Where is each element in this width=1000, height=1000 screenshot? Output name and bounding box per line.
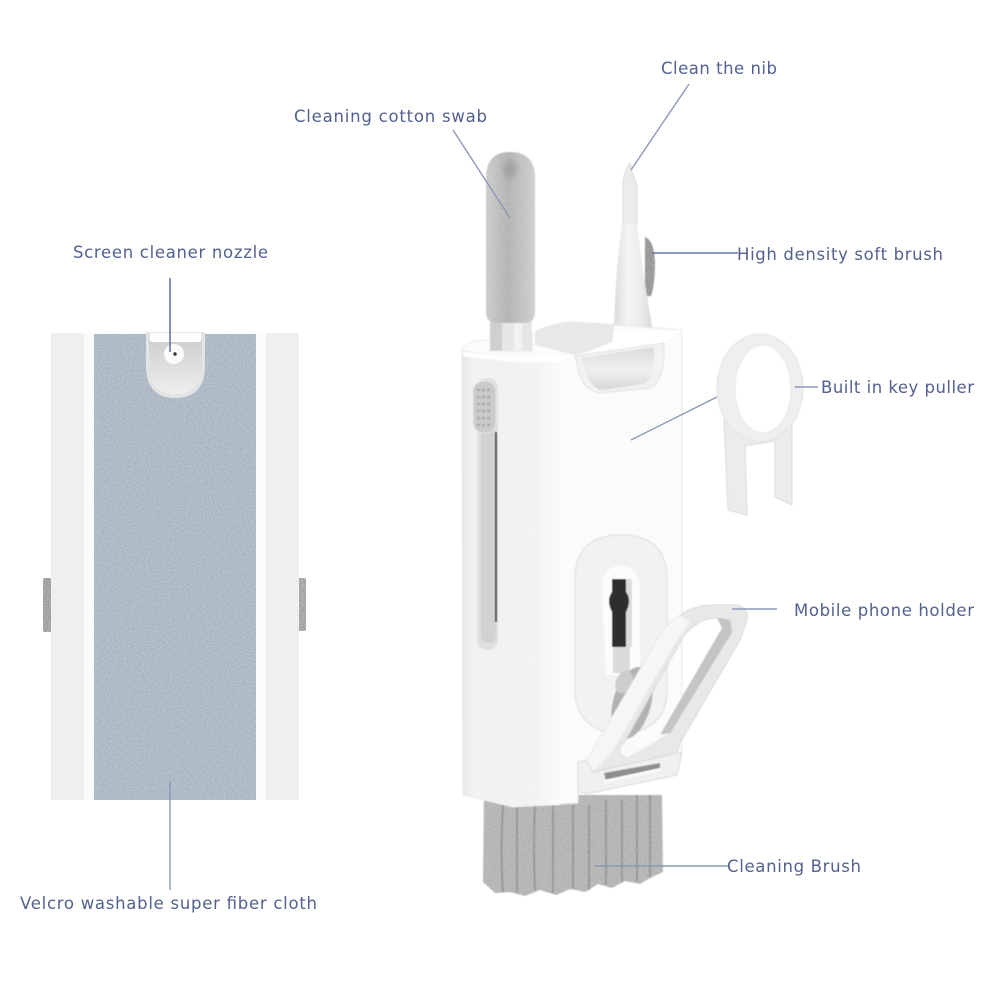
keyhole slot: [609, 579, 632, 673]
folded brush pad: [604, 662, 660, 744]
device casing: [51, 333, 299, 800]
label: screen cleaner nozzle: Screen cleaner nozzle: [73, 243, 268, 262]
phone holder recess: [575, 535, 667, 735]
super fiber cloth: [94, 334, 256, 800]
knurled slider knob: [473, 381, 496, 433]
icon: right side knob: [298, 578, 306, 631]
cotton swab stem: [490, 320, 532, 356]
leader line: key puller, body: [631, 397, 717, 440]
panel: flat cleaner device, back view: [43, 332, 306, 800]
leader line: fiber cloth: [169, 782, 171, 890]
side slider slot: [477, 378, 498, 650]
cleaning brush bristles: [483, 795, 663, 896]
leader line: clean the nib: [631, 84, 689, 170]
icon: left side knob: [43, 578, 52, 632]
leader line: key puller, ring: [795, 386, 818, 388]
nib cleaning pen: [614, 163, 653, 332]
label: cleaning cotton swab: Cleaning cotton swab: [294, 107, 487, 126]
leader line: phone holder: [732, 608, 777, 610]
label: cleaning brush: Cleaning Brush: [727, 857, 861, 876]
label: mobile phone holder: Mobile phone holder: [794, 601, 974, 620]
leader line: soft brush: [652, 252, 738, 254]
label: high density soft brush: High density soft brush: [737, 245, 943, 264]
label: built in key puller: Built in key puller: [821, 378, 974, 397]
lid top: [535, 322, 614, 355]
thumb notch: [575, 343, 664, 393]
mobile phone holder stand: [587, 605, 747, 772]
key puller: [717, 334, 803, 515]
device body: [462, 322, 682, 807]
screen cleaner nozzle recess: [146, 332, 205, 398]
panel: multifunction cleaning device, front view: [462, 152, 803, 896]
cotton swab tip: [486, 152, 535, 323]
leader line: cotton swab: [453, 130, 510, 218]
stand hinge clip: [578, 752, 681, 794]
label: velcro cloth: Velcro washable super fiber cloth: [20, 894, 317, 913]
leader line: cleaning brush: [595, 865, 728, 867]
leader line: screen cleaner nozzle: [169, 278, 171, 352]
label: clean the nib: Clean the nib: [661, 59, 777, 78]
high density soft brush: [645, 237, 655, 296]
